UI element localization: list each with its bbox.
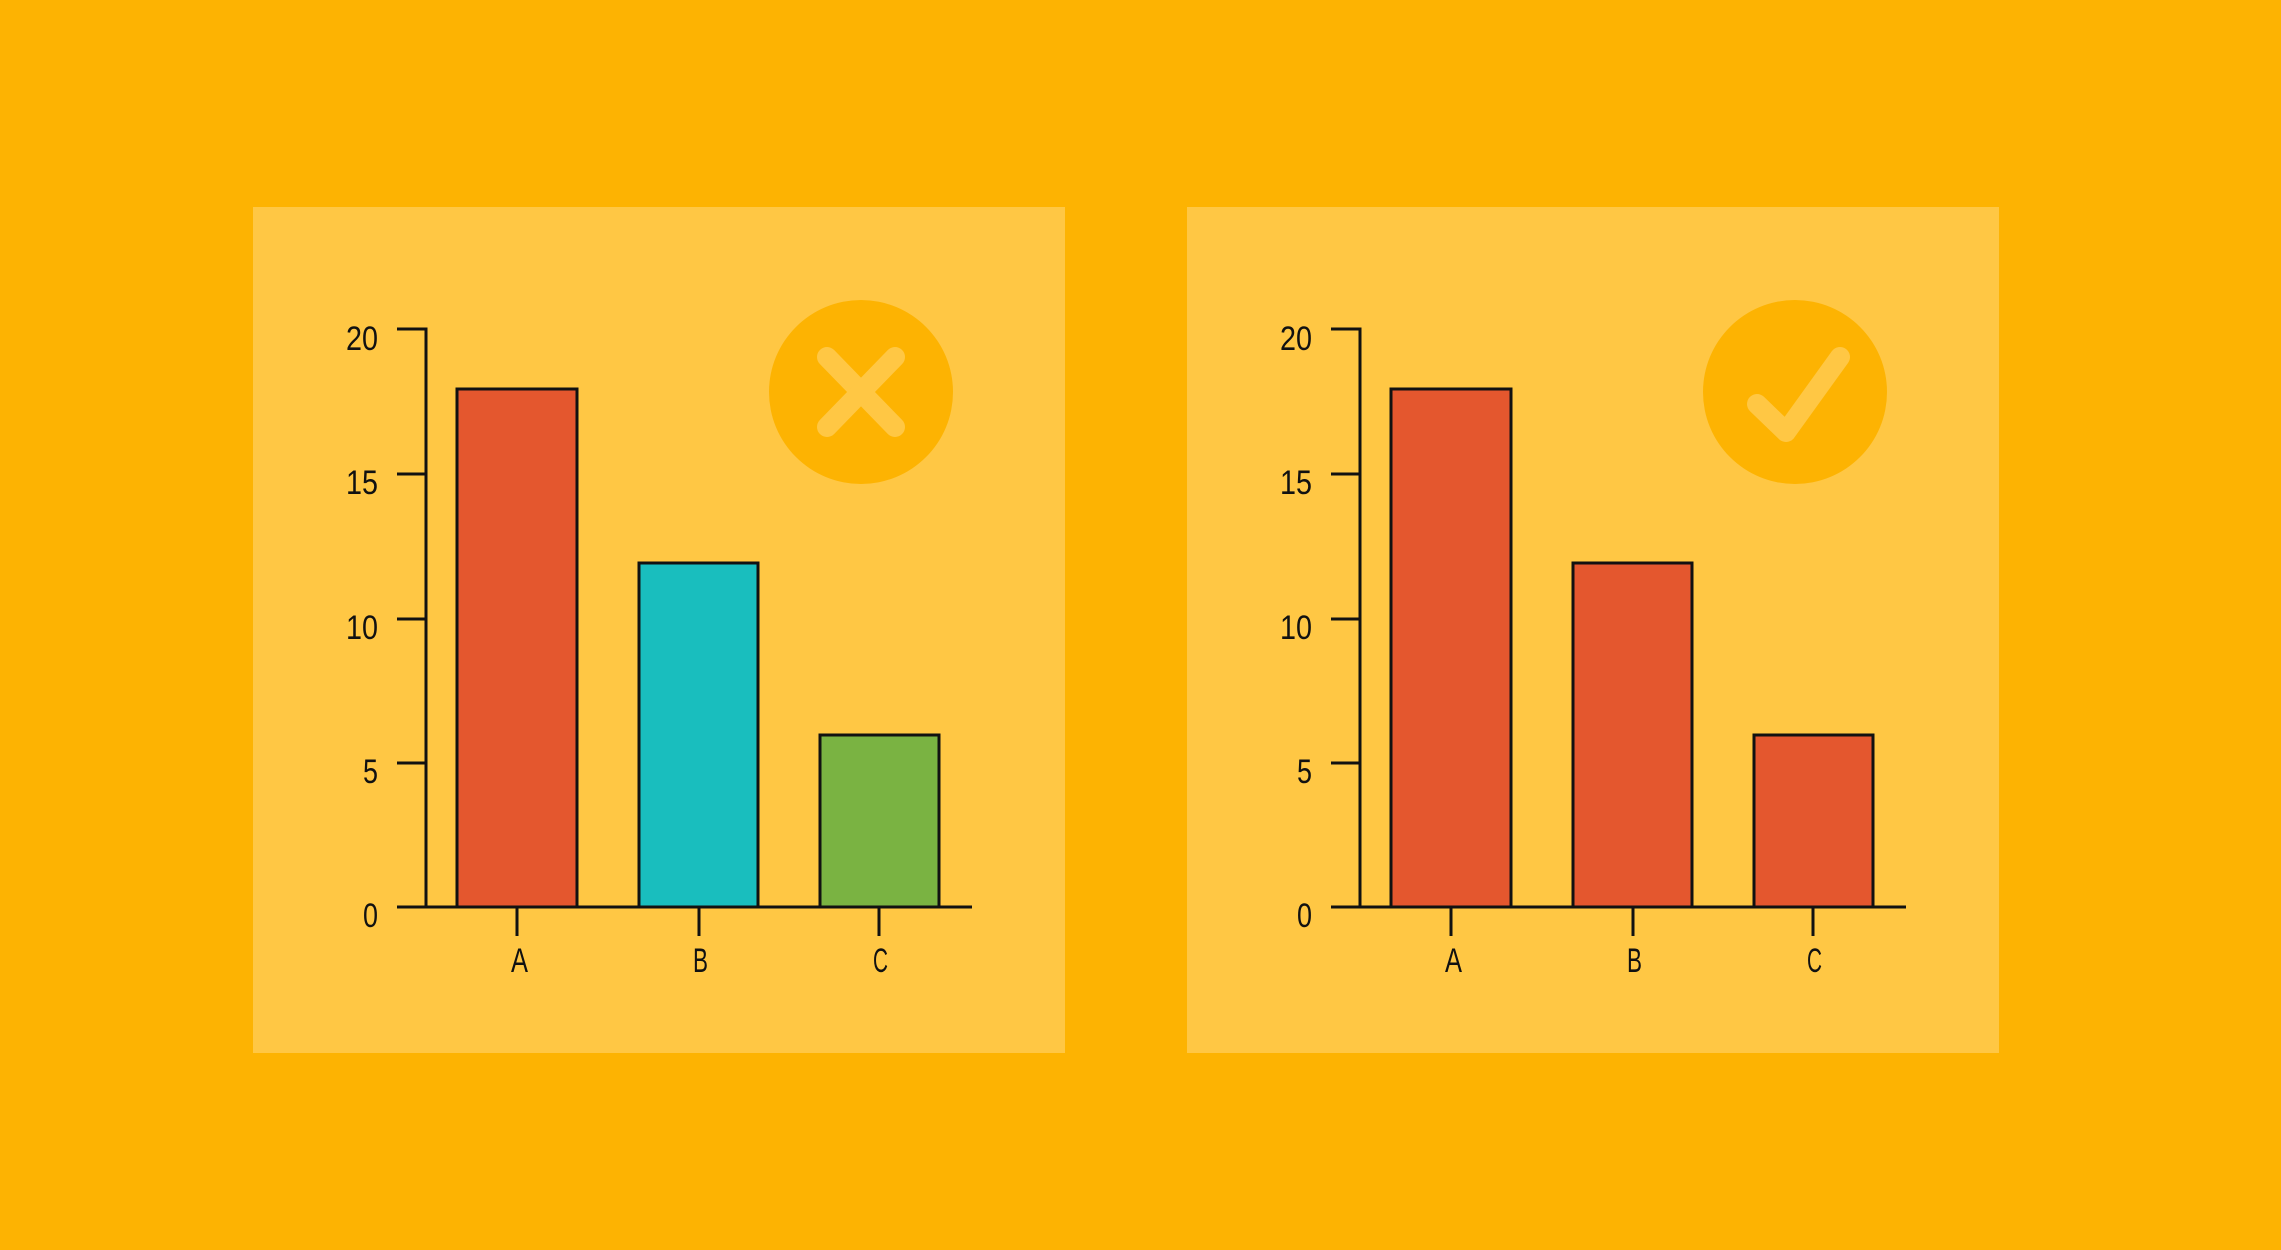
bar chart: single color: 10 [1280,609,1312,647]
bar chart: single color: C [1807,942,1822,980]
bar chart: multicolor: B [693,942,708,980]
bar chart: single color: 20 [1280,320,1312,358]
bar chart: multicolor: 15 [346,464,378,502]
bar chart: single color: 0 [1297,897,1312,935]
bar chart: single color: 5 [1297,753,1312,791]
bar chart: multicolor: C [873,942,888,980]
bar chart: multicolor: 20 [346,320,378,358]
bar chart: single color: B [1627,942,1642,980]
bar chart: single color: 15 [1280,464,1312,502]
panel: bad chart [253,207,1065,1053]
bar chart: multicolor: 5 [363,753,378,791]
bar chart: multicolor: A [511,942,528,980]
bar chart: single color [1280,320,1906,980]
bar chart: multicolor: 10 [346,609,378,647]
panel: good chart [1187,207,1999,1053]
bar chart: multicolor [346,320,972,980]
icon: cross circle [769,300,953,484]
bar chart: multicolor: 0 [363,897,378,935]
bar chart: single color: A [1445,942,1462,980]
icon: check circle [1703,300,1887,484]
